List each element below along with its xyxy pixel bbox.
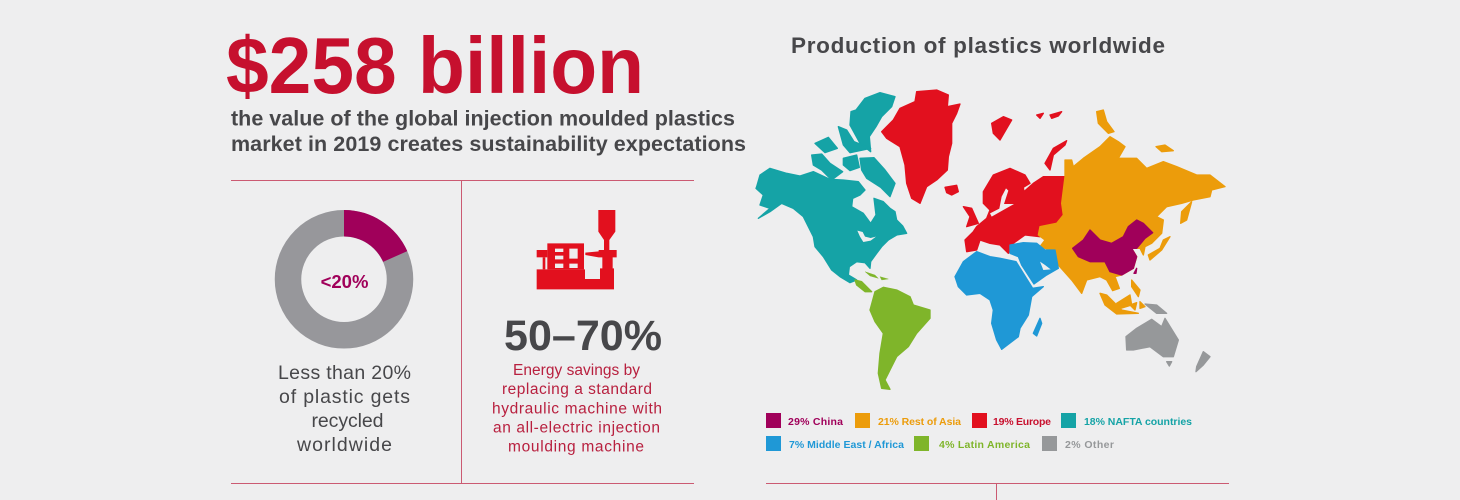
- energy savings caption: Energy savings by: [513, 362, 640, 379]
- legend item: Latin America: 4% Latin America: [939, 439, 1030, 451]
- energy savings caption: [492, 362, 662, 456]
- map heading: Production of plastics worldwide: [791, 33, 1165, 58]
- subtitle: [231, 106, 746, 156]
- energy savings caption: replacing a standard: [502, 381, 652, 398]
- recycling caption: Less than 20%: [278, 362, 411, 384]
- legend item: Other: 2% Other: [1065, 439, 1114, 451]
- recycling caption: recycled: [312, 410, 384, 432]
- legend item: NAFTA countries: [1061, 413, 1192, 428]
- legend item: Rest of Asia: [855, 413, 961, 428]
- icon: injection moulding machine: [537, 210, 617, 289]
- region: Europe: [945, 112, 1067, 253]
- headline value: $258 billion: [226, 21, 644, 110]
- right panel: production of plastics worldwide: [756, 33, 1229, 500]
- legend item: Rest of Asia: 21% Rest of Asia: [878, 416, 961, 428]
- legend item: China: [766, 413, 843, 428]
- region: Latin America: [855, 272, 930, 389]
- subtitle: market in 2019 creates sustainability expectations: [231, 132, 746, 156]
- recycling caption: worldwide: [296, 434, 392, 456]
- legend item: Europe: [972, 413, 1051, 428]
- recycling caption: of plastic gets: [279, 386, 410, 408]
- recycling caption: [278, 362, 411, 456]
- legend item: NAFTA countries: 18% NAFTA countries: [1084, 416, 1192, 428]
- region: Rest of Asia: [1038, 110, 1225, 314]
- left panel: market value and statistics: [226, 21, 746, 484]
- legend: [766, 413, 1192, 451]
- energy savings caption: moulding machine: [508, 438, 644, 456]
- donut chart: recycled share: <20%: [321, 271, 368, 292]
- legend item: China: 29% China: [788, 416, 843, 428]
- legend item: Europe: 19% Europe: [993, 416, 1051, 428]
- region: NAFTA countries: [756, 93, 907, 283]
- energy savings figure: 50–70%: [504, 312, 662, 360]
- legend item: Middle East and Africa: [766, 436, 904, 451]
- energy savings caption: an all-electric injection: [493, 420, 660, 436]
- region: China: [1073, 220, 1153, 275]
- world map: [756, 90, 1225, 389]
- region: Middle East and Africa: [955, 243, 1058, 349]
- donut chart: recycled share: [288, 223, 400, 335]
- energy savings caption: hydraulic machine with: [492, 400, 662, 418]
- legend item: Other: [1042, 436, 1114, 451]
- region: Other: [1126, 304, 1210, 372]
- region: Greenland: [882, 90, 960, 203]
- legend item: Middle East and Africa: 7% Middle East / Africa: [789, 439, 904, 451]
- legend item: Latin America: [914, 436, 1030, 451]
- subtitle: the value of the global injection moulded plastics: [231, 106, 735, 130]
